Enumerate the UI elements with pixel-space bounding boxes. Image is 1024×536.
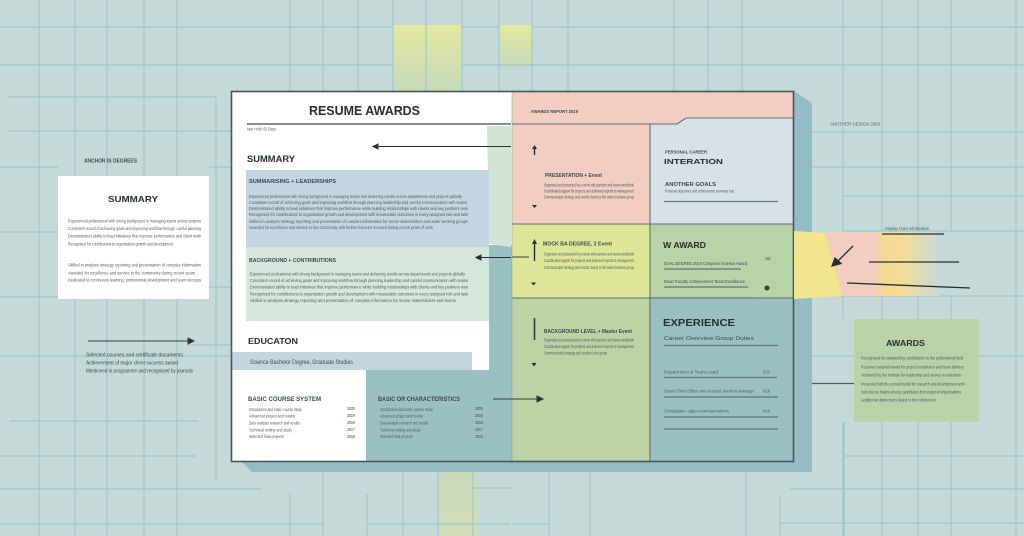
panel: blue summary block: Recognised for contributions to organisation growth and development with measurable outcomes in every assigned role and task xyxy=(249,212,469,217)
dotted page divider xyxy=(511,92,513,461)
panel: pink cell: PRESENTATION + Event xyxy=(545,173,602,179)
text block: left note xyxy=(86,352,193,374)
card: awards: Additional distinctions listed in the references xyxy=(861,398,936,402)
panel: experience cell: 016 xyxy=(763,408,771,414)
panel: experience cell: EXPERIENCE xyxy=(663,317,735,329)
list: right column: 2016 xyxy=(475,434,484,439)
panel: award cell: W AWARD xyxy=(663,240,706,250)
list: left column: BASIC COURSE SYSTEM xyxy=(248,397,321,403)
list: left column xyxy=(248,397,356,439)
list: right column: Technical writing and study xyxy=(380,428,422,432)
panel: experience cell: 202 xyxy=(763,370,771,374)
list: left column: 2020 xyxy=(347,406,356,411)
text block: left note: Selected courses and certificate documents xyxy=(86,352,184,358)
card: summary: Demonstrated ability to lead initiatives that improve performance and client work xyxy=(68,234,202,238)
panel: blue summary block: Demonstrated ability to lead initiatives that improve performance while building relationships with clients and key partners now xyxy=(249,206,469,211)
panel: award cell: DUAL DEGREE 2019 Computer Science Award xyxy=(664,261,747,266)
panel: green summary block: Consistent record of achieving goals and improving workflow through planning leadership and careful communication with teams xyxy=(250,278,468,283)
panel: experience cell: Career Overview Group Duties xyxy=(664,336,754,342)
arrow: to summary xyxy=(373,144,511,149)
panel: blue cell: PERSONAL CAREER xyxy=(665,150,708,154)
card: summary: Recognised for contributions to organisation growth and development xyxy=(68,242,174,246)
list: right column xyxy=(378,397,484,439)
panel: lower green cell: Coordinated support for projects and delivered reports to management xyxy=(544,344,635,349)
card: awards: Honoured by the institute for leadership and service in education xyxy=(861,372,962,378)
panel: blue summary block: Experienced professional with strong background in managing teams and delivering results across departments and projects globally xyxy=(249,194,463,199)
card: summary: Dedicated to continuous learning, professional development and team success xyxy=(68,278,201,282)
panel: award cell: Dean Faculty Achievement Team Excellence xyxy=(664,279,745,284)
list: right column: 2019 xyxy=(475,413,484,418)
card: summary: Skilled in analysis strategy reporting and presentation of complex information xyxy=(68,262,202,268)
panel: green summary block: BACKGROUND + CONTRIBUTIONS xyxy=(249,258,336,264)
panel: left page xyxy=(232,92,512,462)
panel: lower green cell xyxy=(512,298,650,461)
frame outline xyxy=(232,92,794,462)
panel: yellow cell xyxy=(512,224,650,298)
list: right column: 2018 xyxy=(475,420,484,425)
panel: green summary block: Skilled in analysis strategy reporting and presentation of complex information for senior stakeholders and teams xyxy=(250,298,456,303)
list: left column: Technical writing and study xyxy=(249,428,293,432)
list: right column: Advanced project and review xyxy=(380,414,424,418)
panel: yellow cell: Communicated strategy and results clearly to the wider business group xyxy=(544,265,634,270)
arrow: left xyxy=(88,338,194,344)
panel: green summary block: Demonstrated ability to lead initiatives that improve performance while building relationships with clients and key partners now xyxy=(250,284,469,290)
list: left column: 2017 xyxy=(347,427,356,432)
panel: yellow cell: Coordinated support for projects and delivered reports to management xyxy=(544,258,635,263)
card: summary: Experienced professional with strong background in managing teams across projects xyxy=(68,218,201,224)
callout lines xyxy=(847,234,970,288)
connector to awards card xyxy=(812,382,854,384)
list: left column: 2019 xyxy=(347,413,356,418)
card: awards: Selected as finalist among candidates from regional organisations xyxy=(861,390,961,394)
list: left column: Advanced project and review xyxy=(249,414,296,418)
tab divider lines xyxy=(512,118,793,461)
panel: award cell: 201 xyxy=(765,256,772,261)
panel: lower green cell: Organised and presented key events with partners and teams worldwide xyxy=(544,338,634,342)
list: right column: BASIC OR CHARACTERISTICS xyxy=(378,397,460,403)
coloured band: right of document xyxy=(794,226,970,299)
heading: summary: SUMMARY xyxy=(247,154,295,164)
list: left column: Selected final projects xyxy=(249,434,284,439)
panel: blue cell: INTERATION xyxy=(664,157,723,166)
panel: blue cell: Personal objectives and achievement summary text xyxy=(665,188,735,194)
panel: pink cell: Organised and presented key events with partners and teams worldwide xyxy=(544,182,634,188)
list: left column: Introduction and basic course study xyxy=(249,407,303,412)
card: summary xyxy=(58,176,209,299)
panel: blue summary block: Awarded for excellence and service to the community with further honours received during recent years of work xyxy=(249,225,434,230)
label: top right: ANOTHER DESIGN 2020 xyxy=(830,122,880,128)
card: awards: Presented with the annual medal for research and development work xyxy=(861,382,966,386)
education bar xyxy=(232,352,472,370)
education bar: Science Bachelor Degree, Graduate Studies xyxy=(250,360,353,366)
card: summary: Awarded for excellence and service to the community during recent years xyxy=(68,270,195,276)
list: left column: 2018 xyxy=(347,420,356,425)
list: right column: Data analysis research and results xyxy=(380,420,428,426)
panel: green summary block: Recognised for contributions to organisation growth and development with measurable outcomes in every assigned role and task xyxy=(250,292,469,296)
panel: blue cell xyxy=(650,118,794,224)
panel: pink cell: Communicated strategy and results clearly to the wider business group xyxy=(544,194,634,200)
text block: left note: Achievement of major client success award xyxy=(86,360,178,366)
panel: pink header: AWARDS REPORT 2019 xyxy=(531,109,578,114)
list: right column: Selected final projects xyxy=(380,434,413,439)
arrow: diagonal xyxy=(832,246,853,266)
panel: blue summary block: Consistent record of achieving goals and improving workflow through planning leadership and careful communication with teams xyxy=(249,200,467,205)
panel: right page xyxy=(493,92,794,461)
heading: education: EDUCATON xyxy=(248,336,298,346)
panel: pink cell: Coordinated support for projects and delivered reports to management xyxy=(544,188,635,194)
panel: experience cell: 018 xyxy=(763,388,771,394)
panel: green summary block xyxy=(246,247,489,321)
panel: experience cell: Department & Team Lead xyxy=(664,370,719,374)
arrow: into lower panel xyxy=(493,396,543,402)
panel: experience cell: Consultant - data communications xyxy=(664,408,730,414)
card: awards xyxy=(854,319,979,422)
callout label: Display Data Information xyxy=(885,226,929,232)
panel: lower green cell: Communicated strategy and results to the group xyxy=(544,350,607,356)
card: awards: Recognised for outstanding contribution to the professional field xyxy=(861,356,964,360)
panel: blue summary block: SUMMARISING + LEADERSHIPS xyxy=(249,179,336,185)
arrow: to green block xyxy=(476,255,511,260)
subtitle: Non Hold: 05 Days xyxy=(247,126,276,132)
panel: pink cell xyxy=(512,124,650,224)
panel: pink header xyxy=(512,92,794,126)
panel: blue summary block: Skilled in analysis strategy reporting and presentation of complex information for senior stakeholders and wider working groups xyxy=(249,219,468,224)
panel: green summary block: Experienced professional with strong background in managing teams and delivering results across departments and projects globally xyxy=(250,272,466,276)
card: summary: Consistent record of achieving goals and improving workflow through careful planning xyxy=(68,226,202,231)
text block: left note: Mentioned in programme and recognised by journals xyxy=(86,368,193,374)
frame shadow xyxy=(242,91,812,472)
card: awards: AWARDS xyxy=(886,339,926,348)
list: right column: 2020 xyxy=(475,406,484,411)
list: right column: Introduction and basic course study xyxy=(380,407,434,412)
panel: lower green cell: BACKGROUND LEVEL + Master Event xyxy=(544,329,632,335)
label: top left: ANCHOR IS DEGREES xyxy=(84,158,138,164)
list: right column: 2017 xyxy=(475,427,484,432)
panel: experience cell xyxy=(650,298,794,461)
panel: blue cell: ANOTHER GOALS xyxy=(665,182,716,188)
panel: experience cell: Senior Client Officer and Account Services Manager xyxy=(664,388,754,394)
panel: yellow cell: MOCK BA DEGREE, 2 Event xyxy=(543,242,612,248)
resume document xyxy=(232,92,794,462)
list: left column: Data analysis research and results xyxy=(249,420,300,426)
card: awards: Received national award for project excellence and team delivery xyxy=(861,364,965,370)
title: RESUME AWARDS xyxy=(309,103,420,118)
card: summary: SUMMARY xyxy=(108,194,158,204)
panel: award cell xyxy=(650,224,794,298)
panel: yellow cell: Organised and presented key events with partners and teams worldwide xyxy=(544,252,634,256)
list: left column: 2016 xyxy=(347,434,356,439)
panel: blue summary block xyxy=(246,170,489,247)
